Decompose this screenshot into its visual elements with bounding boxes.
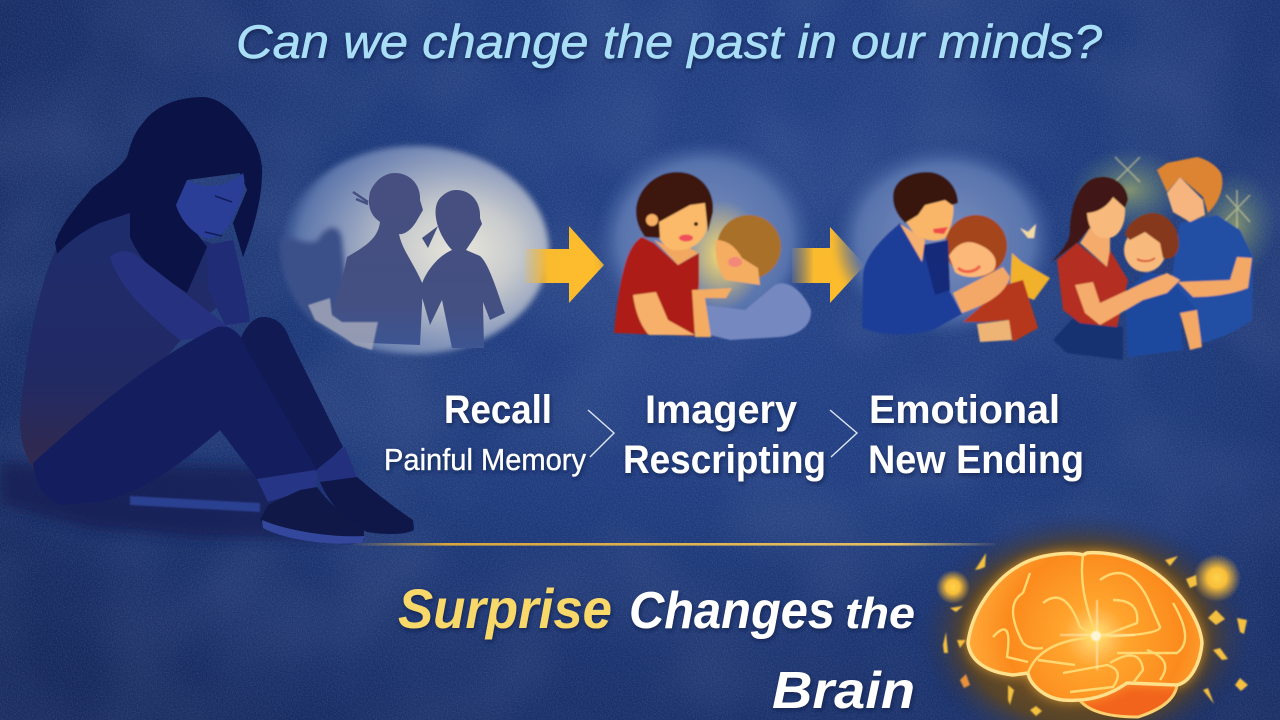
label: emotional new ending	[868, 388, 1084, 482]
headline: surprise changes the brain: Brain	[772, 662, 915, 720]
woman face	[1087, 197, 1125, 238]
woman skirt	[1053, 318, 1123, 360]
label: imagery rescripting	[623, 388, 826, 482]
chevron: first	[588, 410, 614, 457]
headline: surprise changes the brain: Changes	[629, 582, 835, 640]
near leg	[33, 327, 317, 505]
upper arm	[110, 251, 240, 340]
child cloth	[963, 280, 1038, 342]
woman shirt	[1057, 243, 1128, 327]
label: recall painful memory	[384, 388, 586, 477]
forearm	[207, 240, 250, 325]
light orbs	[1193, 554, 1241, 602]
shirt	[614, 237, 699, 336]
man head and hair	[1167, 177, 1205, 222]
head	[656, 200, 707, 250]
scene: family together	[1050, 148, 1277, 360]
far sock and shoe	[316, 447, 358, 492]
label: emotional new ending: Emotional	[869, 388, 1060, 432]
label: imagery rescripting: Rescripting	[623, 438, 826, 482]
icon: glowing brain	[917, 512, 1253, 720]
face	[176, 173, 244, 238]
blanket	[706, 283, 811, 340]
floor shadow	[0, 462, 345, 540]
cerebrum	[968, 553, 1202, 700]
light patch	[308, 298, 378, 350]
boy head	[1124, 228, 1166, 272]
divider line	[350, 543, 995, 546]
scene: recall silhouettes	[280, 146, 549, 354]
man head	[905, 200, 953, 240]
headline: surprise changes the brain	[398, 577, 915, 720]
woman arm	[1075, 273, 1180, 325]
scene: emotional new ending hug	[833, 144, 1057, 342]
child head	[945, 215, 1007, 277]
brain glow	[968, 553, 1202, 700]
near sock and shoe	[257, 470, 318, 502]
left fading silhouette	[280, 228, 352, 340]
neck	[654, 240, 698, 265]
arrow: recall to rescripting	[524, 226, 604, 303]
boy shirt	[1125, 272, 1197, 357]
confetti	[943, 553, 1248, 716]
arrow: rescripting to new ending	[792, 227, 865, 303]
cerebellum	[1078, 682, 1177, 717]
butterfly	[1020, 224, 1036, 238]
headline: surprise changes the brain: Surprise	[398, 577, 612, 640]
man arm	[953, 267, 1010, 313]
illustration: sad seated woman	[0, 97, 414, 544]
woman hair	[1050, 177, 1128, 263]
far leg	[238, 317, 343, 472]
man shirt	[1170, 215, 1253, 343]
man arm	[1178, 257, 1252, 297]
label: imagery rescripting: Imagery	[645, 388, 798, 432]
jacket	[862, 223, 962, 334]
torso	[20, 212, 225, 472]
right silhouette	[420, 190, 505, 348]
arms	[633, 292, 695, 335]
central silhouette	[332, 173, 423, 345]
baby	[717, 215, 781, 279]
woman neck	[1080, 228, 1110, 267]
title: Can we change the past in our minds?	[236, 15, 1102, 68]
central spark	[1077, 617, 1113, 653]
star burst	[1010, 253, 1050, 300]
hair	[55, 97, 262, 293]
headline: surprise changes the brain: the	[845, 589, 915, 638]
folds	[993, 555, 1185, 692]
label: recall painful memory: Painful Memory	[384, 442, 586, 477]
label: emotional new ending: New Ending	[868, 438, 1084, 482]
chevron: second	[830, 410, 857, 457]
sparkle glow	[1070, 148, 1190, 232]
scene: imagery rescripting	[595, 140, 815, 340]
label: recall painful memory: Recall	[444, 388, 552, 432]
